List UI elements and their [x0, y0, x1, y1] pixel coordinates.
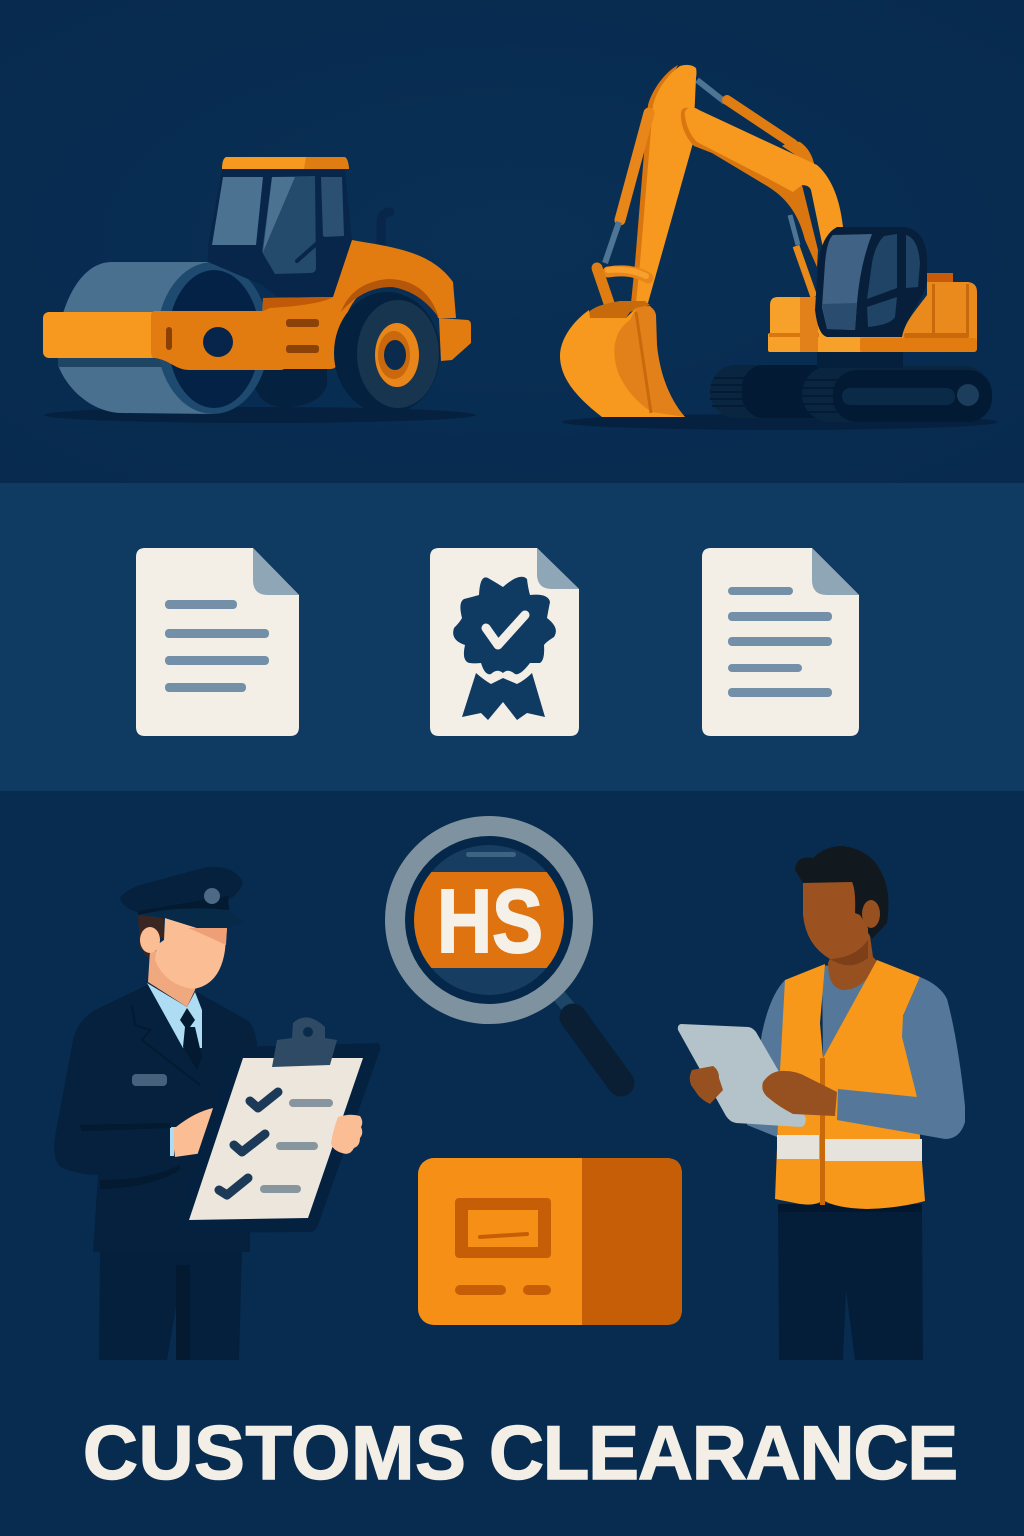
trousers [778, 1204, 923, 1360]
illustration: cargo box [418, 1158, 682, 1325]
illustration: magnifying glass with HS code [395, 826, 621, 1083]
excavator cab [815, 227, 927, 337]
rear wheel [334, 292, 440, 414]
icon: document right [702, 548, 859, 736]
machine house [768, 273, 977, 352]
front frame [43, 311, 286, 370]
upper cylinder [697, 80, 815, 168]
hand on clipboard [171, 1108, 213, 1157]
hair [795, 846, 888, 939]
panel: document icons [136, 548, 859, 736]
rear body [260, 240, 456, 369]
exhaust [381, 212, 390, 245]
bucket [560, 301, 685, 417]
illustration: road roller [43, 157, 476, 423]
neck and shirt [822, 922, 877, 1058]
shirt and tie [147, 983, 202, 1070]
face [803, 882, 868, 959]
title: CUSTOMS [83, 1411, 488, 1496]
far arm [747, 980, 790, 1137]
tracks [710, 352, 992, 422]
trousers [99, 1250, 242, 1360]
hand right [331, 1115, 362, 1154]
name tag [132, 1074, 167, 1086]
boom [681, 108, 843, 267]
lower cylinder [790, 215, 814, 297]
icon: document left [136, 548, 299, 736]
HS label: HS [437, 872, 543, 972]
ear [862, 900, 880, 928]
jacket [54, 985, 257, 1252]
neck and face [138, 915, 227, 1007]
tablet [678, 1024, 806, 1127]
near arm [837, 977, 965, 1139]
panel: documents band [0, 483, 1024, 791]
icon: seal [453, 577, 556, 674]
drum [58, 262, 269, 414]
icon: checkmark [486, 615, 525, 645]
bucket linkage [597, 268, 648, 312]
title: CLEARANCE [489, 1411, 957, 1496]
stick [605, 65, 696, 303]
vest [775, 960, 925, 1209]
illustration: excavator [560, 65, 998, 430]
checklist [219, 1092, 329, 1195]
shipping label [455, 1198, 551, 1258]
illustration: customs officer [54, 867, 380, 1360]
clipboard [173, 1017, 380, 1233]
hands [690, 1066, 837, 1116]
illustration: worker in safety vest [678, 846, 965, 1360]
icon: certificate document [430, 548, 579, 736]
cab [208, 157, 352, 297]
cap [120, 867, 245, 928]
icon: ribbon [462, 673, 545, 720]
